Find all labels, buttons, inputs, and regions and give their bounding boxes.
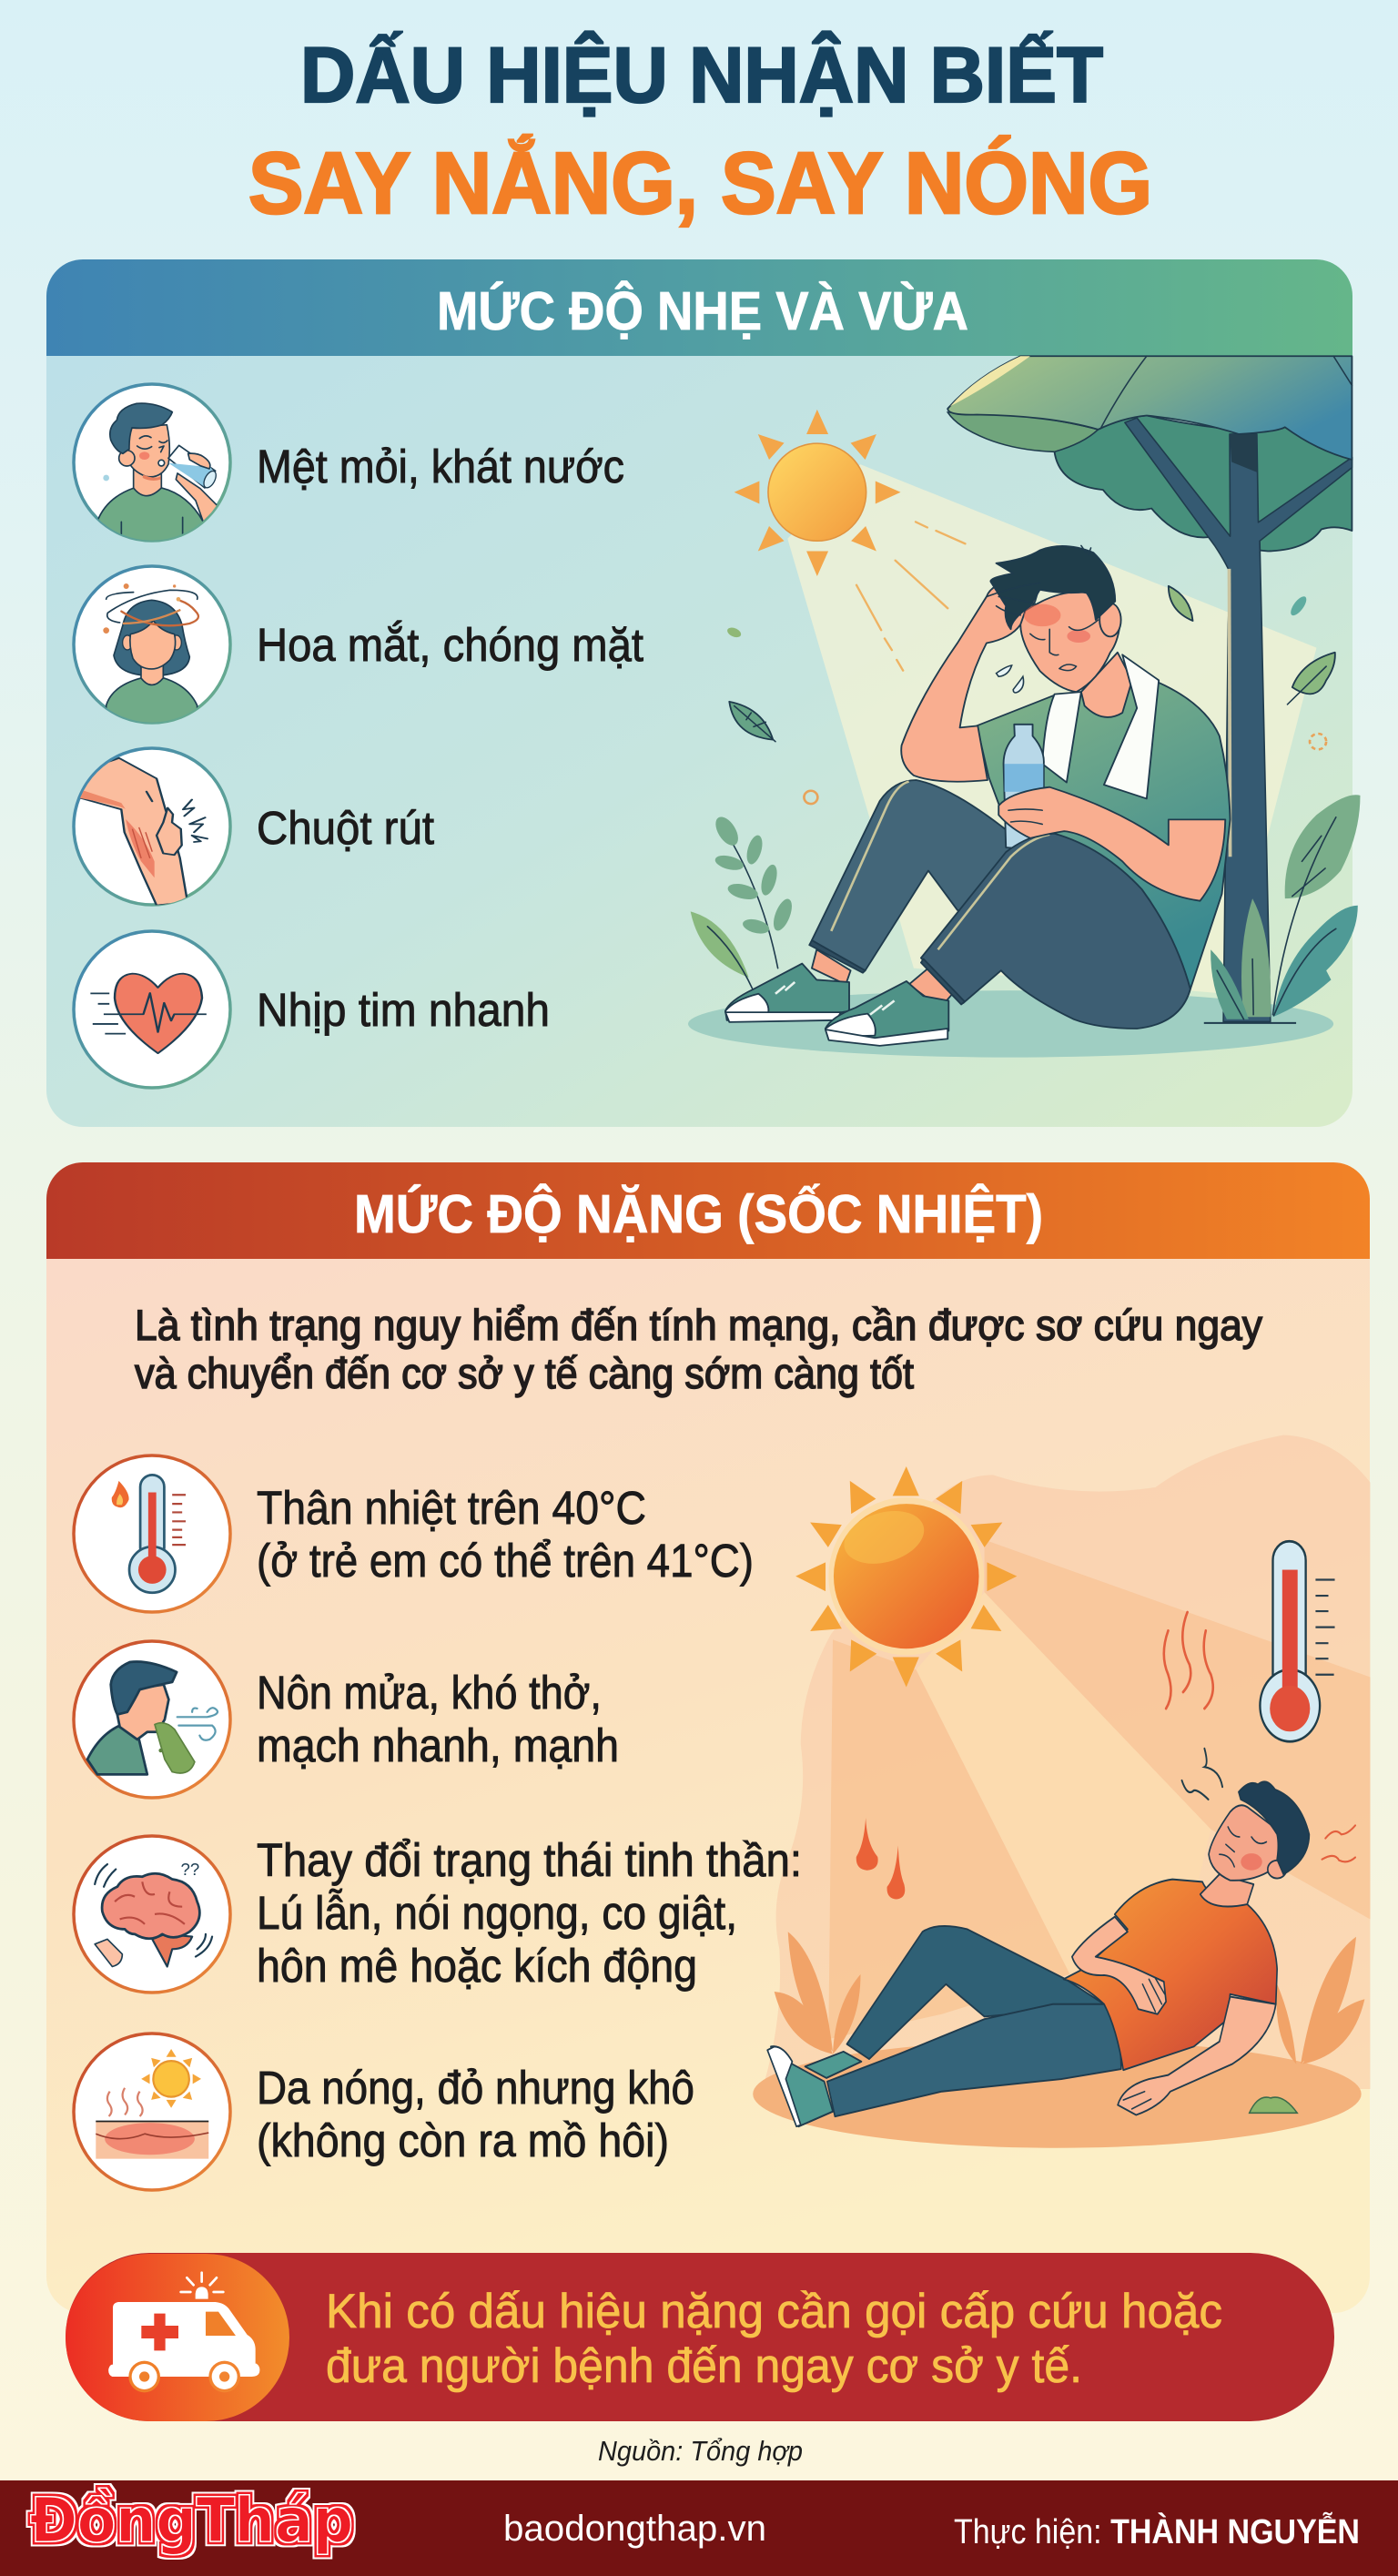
banner text: Khi có dấu hiệu nặng cần gọi cấp cứu hoặc bbox=[326, 2285, 1222, 2338]
footer bar bbox=[0, 2480, 1398, 2576]
panel body bbox=[46, 1259, 1370, 2313]
icon: dizzy woman bbox=[103, 583, 198, 725]
intro text: và chuyển đến cơ sở y tế càng sớm càng tốt bbox=[135, 1349, 914, 1397]
icon: sun bbox=[734, 410, 965, 671]
symptom text 2: Hoa mắt, chóng mặt bbox=[257, 619, 643, 671]
shoe bbox=[767, 2046, 833, 2126]
heat waves bbox=[1164, 1612, 1213, 1709]
icon: leg cramp bbox=[75, 758, 208, 906]
symptom text: temperature: (ở trẻ em có thể trên 41°C) bbox=[257, 1535, 754, 1587]
head bbox=[987, 545, 1121, 693]
symptom text: mental state: hôn mê hoặc kích động bbox=[257, 1940, 697, 1992]
icon: man vomiting bbox=[87, 1662, 218, 1774]
sweat drops bbox=[856, 1818, 905, 1900]
ankles and shoes bbox=[725, 940, 965, 1046]
symptom text: mental state: Lú lẫn, nói ngọng, co giật, bbox=[257, 1887, 737, 1939]
symptom text: mental state: Thay đổi trạng thái tinh thần: bbox=[257, 1834, 802, 1886]
icon: ambulance bbox=[108, 2273, 259, 2392]
symptom text: vomiting: mạch nhanh, mạnh bbox=[257, 1719, 619, 1771]
pant stripes bbox=[831, 782, 1049, 949]
icon: heart with pulse bbox=[90, 974, 207, 1053]
symptom text: vomiting: Nôn mửa, khó thở, bbox=[257, 1667, 602, 1719]
symptom: fast heartbeat bbox=[74, 931, 230, 1088]
intro text: Là tình trạng nguy hiểm đến tính mạng, cần được sơ cứu ngay bbox=[135, 1301, 1262, 1349]
far leg bbox=[846, 1926, 1104, 2059]
panel heading: MỨC ĐỘ NẶNG (SỐC NHIỆT) bbox=[354, 1183, 1043, 1244]
illustration: collapsed man under hot sun bbox=[753, 1435, 1371, 2148]
panel heading: MỨC ĐỘ NHẸ VÀ VỪA bbox=[437, 280, 968, 341]
arm on belly bbox=[1072, 1917, 1166, 2014]
icon: man drinking water bbox=[97, 402, 217, 541]
panel header bar bbox=[46, 259, 1352, 356]
banner text bbox=[326, 2285, 1222, 2393]
head bbox=[1209, 1781, 1309, 1881]
title bbox=[248, 32, 1152, 232]
symptom text: vomiting bbox=[257, 1667, 619, 1771]
title line 1: DẤU HIỆU NHẬN BIẾT bbox=[300, 32, 1103, 119]
symptom text 4: Nhịp tim nhanh bbox=[257, 984, 550, 1036]
banner background bbox=[66, 2253, 1334, 2421]
symptom text: temperature: Thân nhiệt trên 40°C bbox=[257, 1482, 646, 1534]
logo: ĐồngTháp bbox=[30, 2485, 353, 2556]
far leg bbox=[812, 780, 1055, 970]
website: baodongthap.vn bbox=[503, 2509, 766, 2549]
stress marks bbox=[1182, 1749, 1222, 1800]
symptom: cramp bbox=[74, 748, 230, 906]
forearm and hand bbox=[998, 787, 1225, 901]
towel bbox=[1042, 654, 1159, 798]
ground shadow bbox=[688, 990, 1333, 1058]
panel: severe (heat stroke) bbox=[46, 1162, 1371, 2313]
callout: emergency banner bbox=[66, 2253, 1334, 2421]
symptom: high body temperature bbox=[74, 1455, 230, 1612]
symptom text: temperature bbox=[257, 1482, 754, 1587]
light beams bbox=[828, 1540, 1371, 2039]
plants bbox=[775, 1932, 1364, 2064]
raised arm bbox=[901, 578, 1040, 782]
symptom text 3: Chuột rút bbox=[257, 802, 434, 854]
shirt bbox=[977, 683, 1231, 989]
shirt bbox=[1063, 1880, 1277, 2070]
icon: thermometer bbox=[1260, 1541, 1335, 1741]
symptom text: skin bbox=[257, 2062, 694, 2166]
icon: brain bbox=[95, 1860, 212, 1966]
left plant bbox=[691, 814, 795, 989]
symptom: mental state change bbox=[74, 1836, 230, 1993]
title line 2: SAY NẮNG, SAY NÓNG bbox=[248, 134, 1152, 232]
icon: thermometer with flame bbox=[112, 1475, 186, 1593]
symptom: vomiting bbox=[74, 1641, 230, 1798]
symptom text 1: Mệt mỏi, khát nước bbox=[257, 441, 624, 492]
icon: skin and sun bbox=[96, 2049, 208, 2159]
panel body bbox=[46, 356, 1352, 1127]
symptom: dizziness bbox=[74, 566, 230, 725]
symptom text: skin: Da nóng, đỏ nhưng khô bbox=[257, 2062, 694, 2114]
credit: Thực hiện: THÀNH NGUYỄN bbox=[954, 2511, 1360, 2551]
neck bbox=[1081, 653, 1132, 717]
sun beam bbox=[787, 464, 1316, 994]
banner text: đưa người bệnh đến ngay cơ sở y tế. bbox=[326, 2339, 1082, 2393]
symptom text: skin: (không còn ra mồ hôi) bbox=[257, 2115, 669, 2166]
source note: Nguồn: Tổng hợp bbox=[598, 2435, 803, 2467]
icon: brain: ?? bbox=[181, 1860, 199, 1879]
falling leaves bbox=[725, 586, 1335, 804]
resting arm bbox=[1118, 1997, 1276, 2115]
symptom text: mental state bbox=[257, 1834, 802, 1992]
panel: mild and moderate bbox=[46, 259, 1360, 1127]
peach background blob bbox=[763, 1435, 1371, 2089]
illustration: tired man sitting under a tree bbox=[688, 356, 1360, 1058]
symptom: fatigue and thirst bbox=[74, 384, 230, 555]
near leg bbox=[921, 834, 1190, 1029]
panel header bar bbox=[46, 1162, 1370, 1259]
near leg bbox=[827, 2004, 1121, 2116]
tree bbox=[947, 356, 1352, 1021]
symptom: hot dry skin bbox=[74, 2033, 230, 2190]
ground bbox=[753, 2040, 1362, 2148]
icon: hot sun bbox=[795, 1466, 1017, 1687]
far foot shoe bbox=[805, 2052, 861, 2078]
right plant bbox=[1204, 795, 1360, 1023]
intro text bbox=[135, 1301, 1262, 1397]
neck bbox=[1200, 1874, 1253, 1907]
green bump bbox=[1250, 2097, 1297, 2113]
water bottle bbox=[1004, 725, 1044, 847]
icon badge bbox=[66, 2254, 289, 2421]
